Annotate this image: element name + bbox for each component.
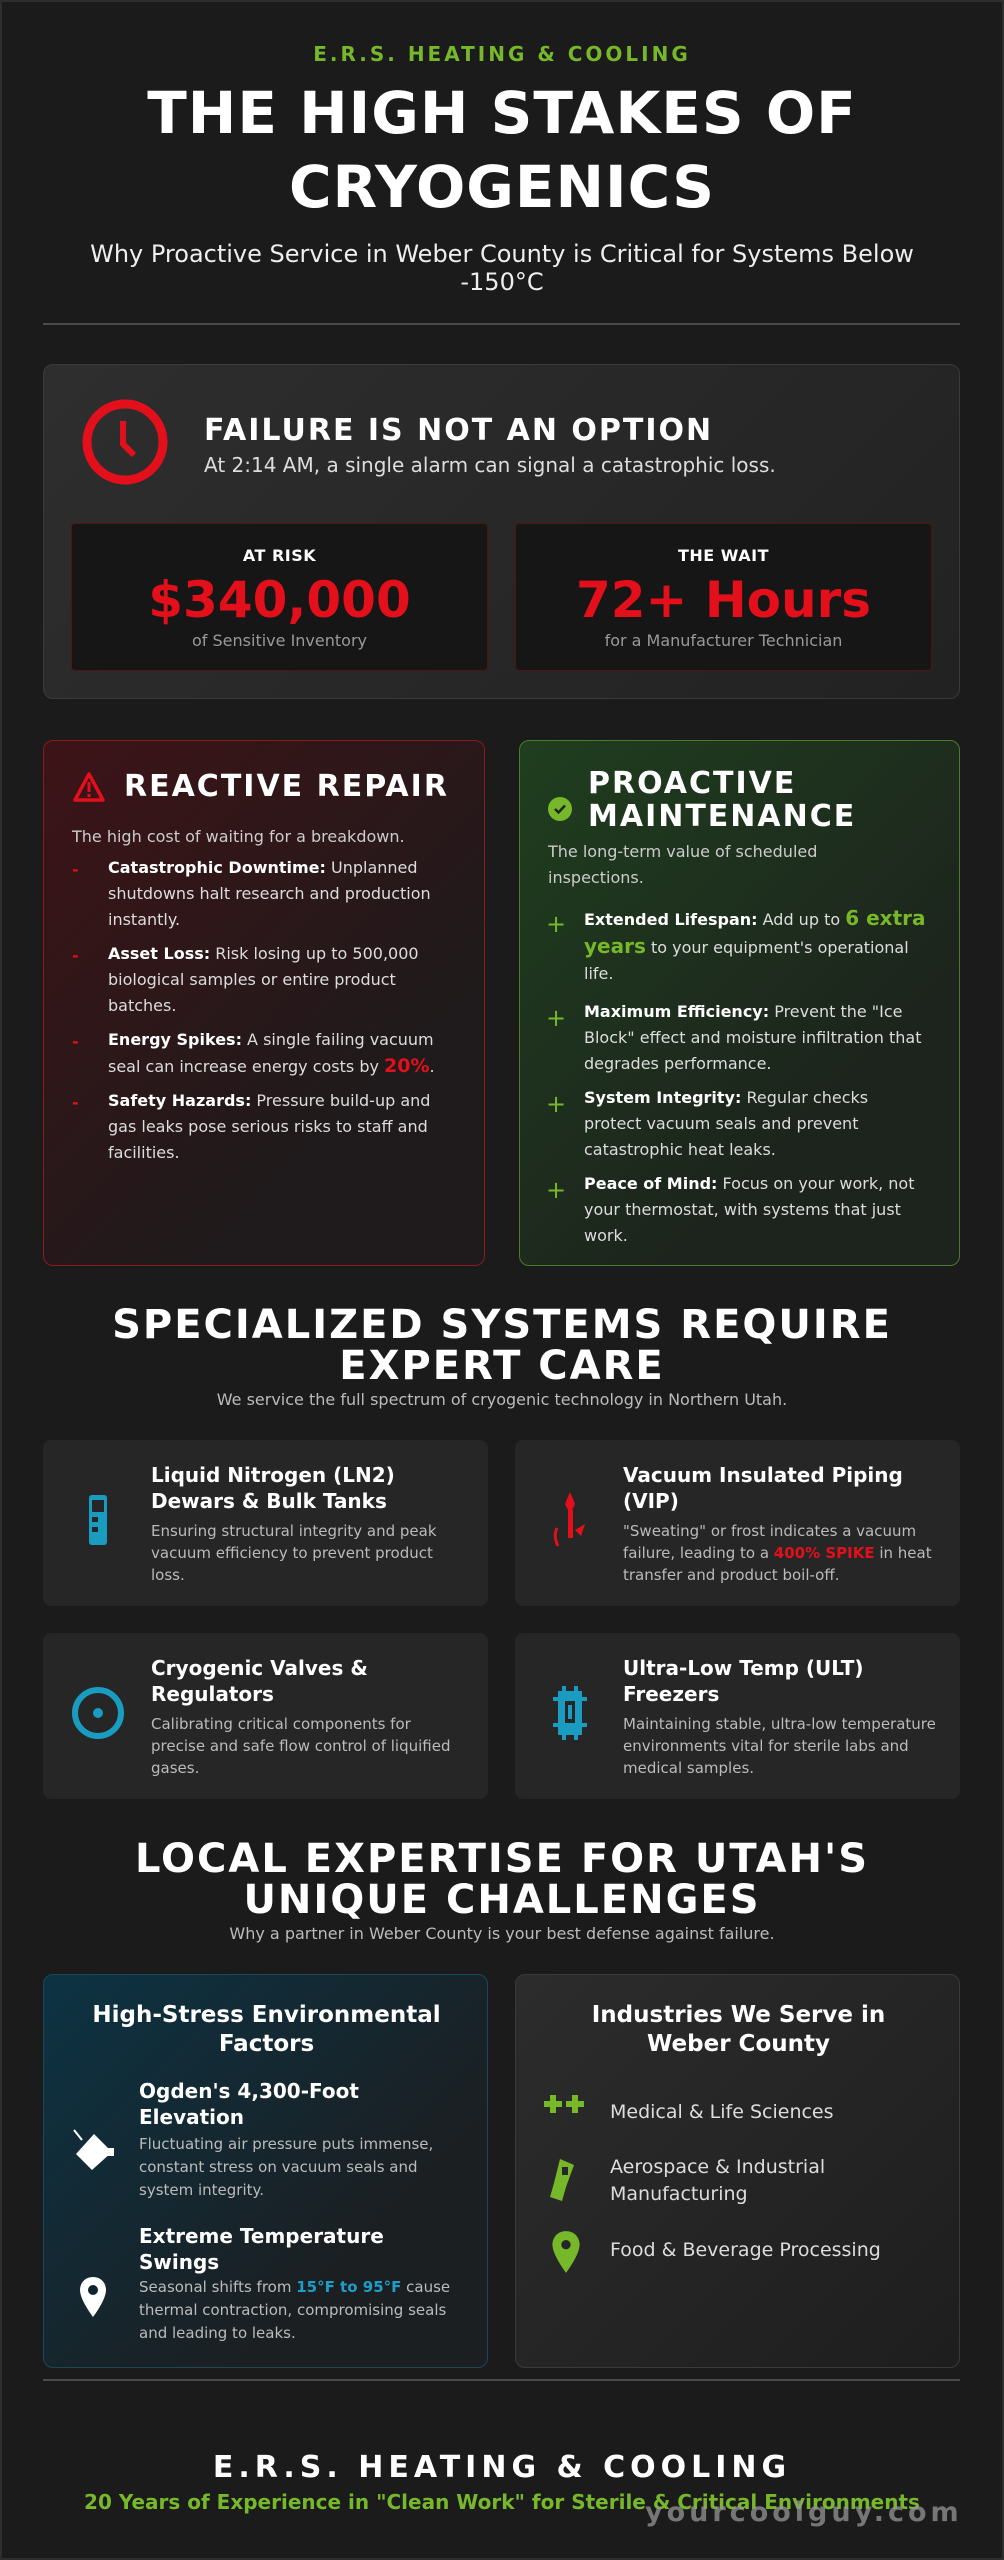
card: ULT freezers: Ultra-Low Temp (ULT) Freezers	[623, 1656, 864, 1706]
icon: warning	[73, 772, 105, 802]
text: proactive subtitle: The long-term value of scheduled inspections.	[548, 842, 817, 887]
heading: specialized systems: SPECIALIZED SYSTEMS REQUIRE	[112, 1302, 892, 1348]
stat: the wait: 72+ Hours	[576, 571, 871, 629]
stat: the wait	[515, 523, 932, 671]
card: LN2 dewars	[43, 1440, 488, 1606]
card: valves	[43, 1633, 488, 1799]
panel: industries served	[515, 1974, 960, 2368]
item: temperature swings: Extreme Temperature Swings	[139, 2224, 384, 2274]
text: local subtitle: Why a partner in Weber County is your best defense against failure.	[229, 1924, 775, 1943]
card: ULT freezers: Maintaining stable, ultra-low temperature environments vital for sterile labs and medical samples.	[623, 1715, 936, 1777]
card: VIP: Vacuum Insulated Piping (VIP)	[623, 1463, 903, 1513]
icon: aerospace	[550, 2159, 574, 2201]
list: proactive benefits: System Integrity: Regular checks protect vacuum seals and prevent catastrophic heat leaks.	[584, 1088, 868, 1159]
list: proactive benefits	[548, 906, 925, 1245]
card: LN2 dewars: Liquid Nitrogen (LN2) Dewars & Bulk Tanks	[151, 1463, 395, 1513]
heading: local expertise	[135, 1836, 869, 1923]
panel: environmental factors	[43, 1974, 488, 2368]
icon: dewar	[89, 1495, 107, 1545]
list: proactive benefits: Peace of Mind: Focus on your work, not your thermostat, with systems that just work.	[584, 1174, 914, 1245]
stat: at risk: of Sensitive Inventory	[192, 631, 367, 650]
stat: at risk	[71, 523, 488, 671]
heading: specialized systems: EXPERT CARE	[339, 1343, 665, 1389]
item: aerospace: Aerospace & Industrial Manufacturing	[610, 2156, 825, 2205]
heading: proactive: PROACTIVE	[588, 766, 796, 801]
heading: specialized systems	[112, 1302, 892, 1389]
stat: the wait: for a Manufacturer Technician	[605, 631, 842, 650]
list: reactive risks: Catastrophic Downtime: Unplanned shutdowns halt research and production instantly.	[108, 858, 431, 929]
heading: reactive: REACTIVE REPAIR	[124, 769, 449, 804]
item: food: Food & Beverage Processing	[610, 2239, 881, 2261]
item: medical: Medical & Life Sciences	[610, 2101, 834, 2123]
title: THE HIGH STAKES OF	[147, 79, 857, 147]
heading: proactive	[588, 766, 856, 834]
card: VIP: "Sweating" or frost indicates a vacuum failure, leading to a 400% SPIKE in heat transfer and product boil-off.	[623, 1522, 932, 1584]
heading: env factors	[92, 2002, 441, 2057]
list: reactive risks	[72, 858, 435, 1162]
icon: medical	[544, 2095, 584, 2113]
item: medical	[544, 2095, 834, 2123]
list: reactive risks: Energy Spikes: A single failing vacuum seal can increase energy costs by 20%.	[108, 1030, 435, 1077]
stat: at risk: $340,000	[148, 571, 411, 629]
panel: reactive repair	[43, 740, 485, 1266]
icon: check	[548, 797, 572, 821]
item: temperature swings: Seasonal shifts from 15°F to 95°F cause thermal contraction, compromising seals and leading to leaks.	[139, 2278, 450, 2342]
title	[147, 79, 857, 221]
icon: location pin	[80, 2277, 106, 2317]
card: valves: Cryogenic Valves & Regulators	[151, 1656, 368, 1706]
list: proactive benefits: Maximum Efficiency: Prevent the "Ice Block" effect and moisture infiltration that degrades performance.	[584, 1002, 922, 1073]
item: temperature swings	[80, 2224, 450, 2342]
text: specialized subtitle: We service the full spectrum of cryogenic technology in Northern Utah.	[217, 1390, 787, 1409]
heading: industries	[592, 2002, 885, 2057]
item: elevation: Fluctuating air pressure puts immense, constant stress on vacuum seals and system integrity.	[139, 2135, 433, 2199]
text: reactive subtitle: The high cost of waiting for a breakdown.	[72, 827, 405, 846]
list: reactive risks: Asset Loss: Risk losing up to 500,000 biological samples or entire product batches.	[108, 944, 419, 1015]
panel: failure is not an option	[43, 364, 960, 699]
text: alarm: At 2:14 AM, a single alarm can signal a catastrophic loss.	[204, 453, 776, 477]
icon: valve	[72, 1687, 124, 1739]
heading: local expertise: LOCAL EXPERTISE FOR UTAH'S	[135, 1836, 869, 1882]
heading: industries: Industries We Serve in	[592, 2002, 885, 2028]
footer brand: E.R.S. HEATING & COOLING	[213, 2450, 791, 2485]
panel: proactive maintenance	[519, 740, 960, 1266]
icon: freezer chip	[553, 1686, 587, 1740]
heading: failure: FAILURE IS NOT AN OPTION	[204, 413, 713, 448]
list: reactive risks: Safety Hazards: Pressure build-up and gas leaks pose serious risks to staff and facilities.	[108, 1091, 430, 1162]
heading: env factors: High-Stress Environmental	[92, 2002, 441, 2028]
stat: at risk: AT RISK	[243, 546, 316, 565]
icon: pin	[552, 2231, 580, 2273]
item: elevation	[73, 2079, 433, 2199]
card: LN2 dewars: Ensuring structural integrity and peak vacuum efficiency to prevent product loss.	[151, 1522, 437, 1584]
title: CRYOGENICS	[289, 153, 715, 221]
subtitle: Why Proactive Service in Weber County is Critical for Systems Below -150°C	[90, 240, 914, 296]
heading: env factors: Factors	[219, 2031, 314, 2057]
card: VIP	[515, 1440, 960, 1606]
header brand: E.R.S. HEATING & COOLING	[313, 42, 691, 66]
item: food	[552, 2231, 881, 2273]
icon: clock	[82, 400, 168, 484]
icon: piping leak	[554, 1492, 585, 1547]
icon: elevation	[73, 2129, 114, 2170]
heading: proactive: MAINTENANCE	[588, 799, 856, 834]
stat: the wait: THE WAIT	[678, 546, 769, 565]
card: valves: Calibrating critical components for precise and safe flow control of liquified gases.	[151, 1715, 450, 1777]
heading: industries: Weber County	[647, 2031, 830, 2057]
watermark: yourcoolguy.com	[645, 2497, 963, 2528]
card: ULT freezers	[515, 1633, 960, 1799]
list: proactive benefits: Extended Lifespan: Add up to 6 extra years to your equipment's operational life.	[584, 906, 925, 983]
heading: local expertise: UNIQUE CHALLENGES	[243, 1877, 761, 1923]
item: elevation: Ogden's 4,300-Foot Elevation	[139, 2079, 359, 2129]
footer tagline: 20 Years of Experience in "Clean Work" for Sterile & Critical Environments	[84, 2490, 920, 2514]
